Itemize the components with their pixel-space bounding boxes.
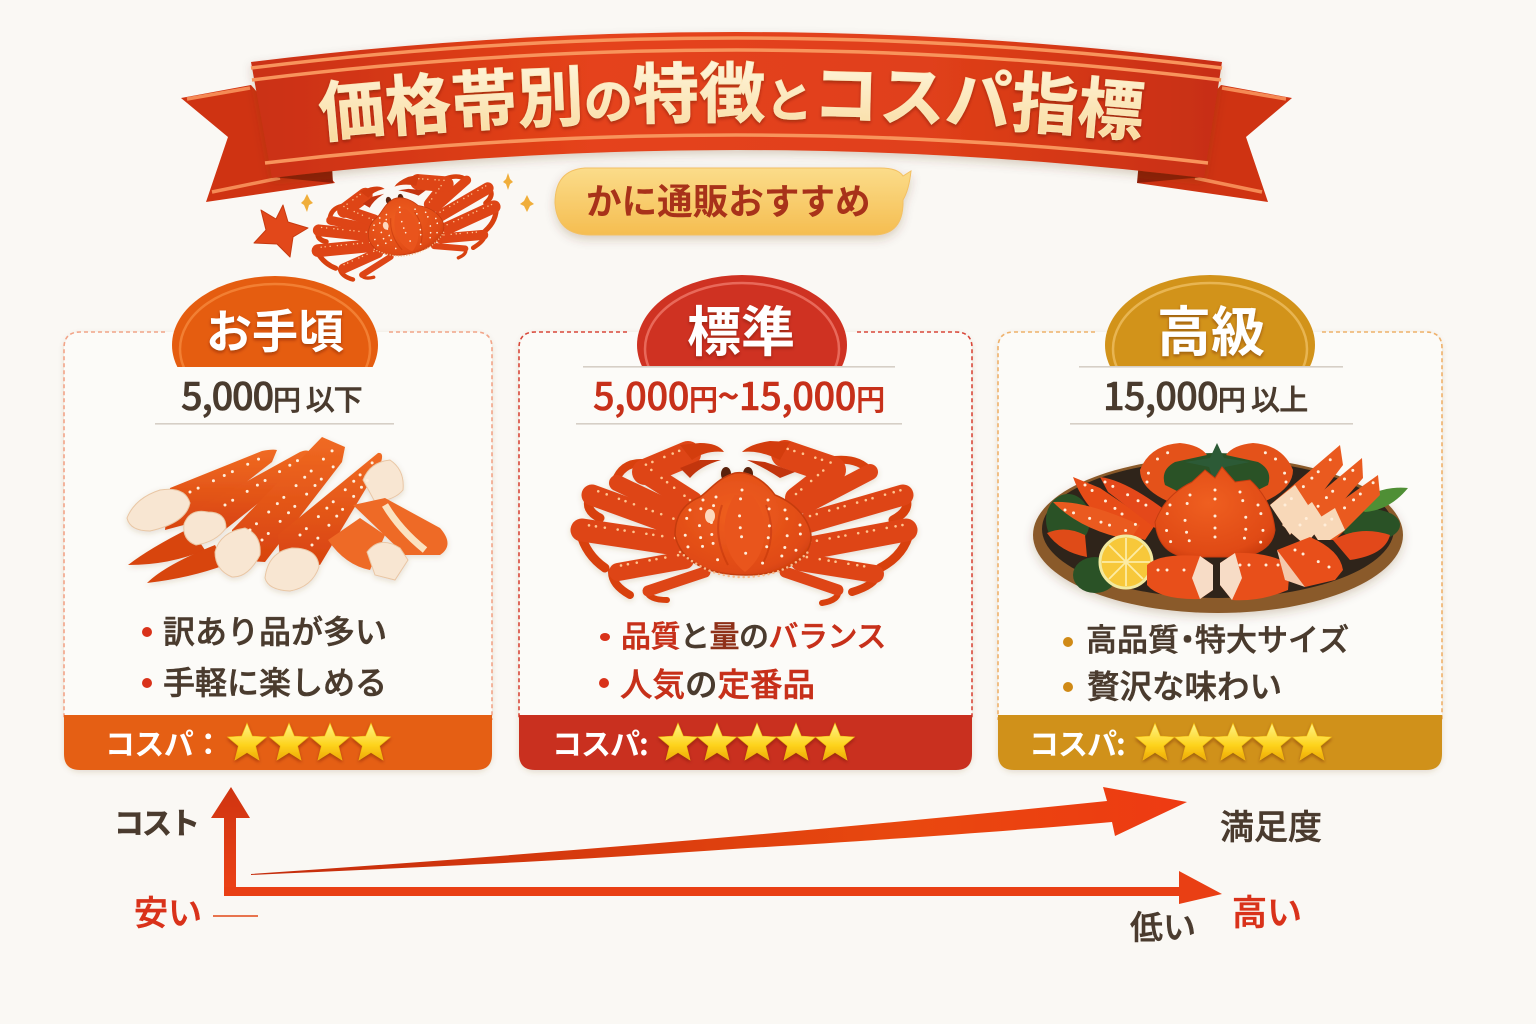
- recommendation speech badge: [555, 168, 911, 235]
- axis label: satisfaction: 満足度: [1220, 800, 1322, 849]
- value rating bar: premium: コスパ:: [1029, 720, 1125, 764]
- tier dome: premium: [1105, 275, 1315, 366]
- feature list: premium: 高品質・特大サイズ: [1086, 615, 1349, 660]
- feature list: budget: [142, 607, 387, 704]
- lemon: [1100, 536, 1152, 588]
- feature list: standard: 人気の定番品: [620, 659, 815, 706]
- ribbon left tail: [181, 85, 335, 202]
- tier dome: premium: 高級: [1157, 288, 1265, 367]
- feature list: premium: [1063, 615, 1349, 708]
- value rating bar: budget: コスパ：: [105, 720, 223, 764]
- small crab with starfish: [254, 158, 534, 291]
- image: crab legs pile: [127, 437, 448, 591]
- image: whole crab: [580, 441, 910, 603]
- arrow: satisfaction axis: [224, 871, 1222, 904]
- ribbon main band: [251, 32, 1222, 178]
- card body: [519, 332, 972, 770]
- right crab legs: [1270, 445, 1380, 545]
- leg chunks: [1147, 531, 1390, 600]
- title ribbon: [181, 31, 1292, 202]
- tier dome: standard: [637, 275, 847, 366]
- tier dome: budget: [172, 276, 378, 367]
- crab shell: [1155, 467, 1275, 557]
- value rating bar: standard: コスパ:: [552, 720, 648, 764]
- feature list: budget: 手軽に楽しめる: [163, 658, 387, 704]
- tier dome: budget: お手頃: [206, 296, 344, 362]
- panel: standard tier: [519, 275, 972, 770]
- ribbon right tail: [1137, 85, 1292, 202]
- price: premium: 15,000円以上: [1103, 366, 1307, 421]
- title text: 価格帯別の特徴とコスパ指標: [318, 60, 1146, 146]
- crab claws: [1140, 443, 1293, 503]
- left crab legs: [1047, 477, 1165, 557]
- card body: [64, 332, 492, 770]
- badge text: かに通販おすすめ: [586, 174, 871, 225]
- arrow: rising trend: [251, 787, 1187, 875]
- axis label: low satisfaction: 低い: [1130, 901, 1196, 949]
- icon: crab: [305, 158, 506, 291]
- feature list: budget: 訳あり品が多い: [163, 607, 387, 653]
- value rating bar: budget: [64, 715, 492, 770]
- garnish greens: [1046, 443, 1408, 593]
- card body: [998, 332, 1442, 770]
- feature list: standard: [599, 612, 886, 706]
- icon: starfish: [254, 205, 308, 257]
- chart: cost vs satisfaction: [114, 787, 1322, 949]
- image: crab platter: [1033, 443, 1408, 613]
- feature list: premium: 贅沢な味わい: [1087, 661, 1282, 708]
- panel: premium tier: [998, 275, 1442, 770]
- panel: budget tier: [64, 276, 492, 770]
- value rating bar: premium: [998, 715, 1442, 770]
- price: budget: 5,000円以下: [181, 366, 362, 421]
- price: standard: 5,000円~15,000円: [593, 366, 885, 421]
- arrow: cost axis: [211, 787, 250, 896]
- tier dome: standard: 標準: [687, 288, 795, 367]
- icon: gold sparkles: [301, 173, 534, 212]
- axis label: cost: コスト: [114, 799, 198, 843]
- axis label: high cost: 高い: [1232, 885, 1302, 936]
- feature list: standard: 品質と量のバランス: [621, 612, 886, 656]
- value rating bar: standard: [519, 715, 972, 770]
- axis label: low cost: 安い: [134, 886, 202, 935]
